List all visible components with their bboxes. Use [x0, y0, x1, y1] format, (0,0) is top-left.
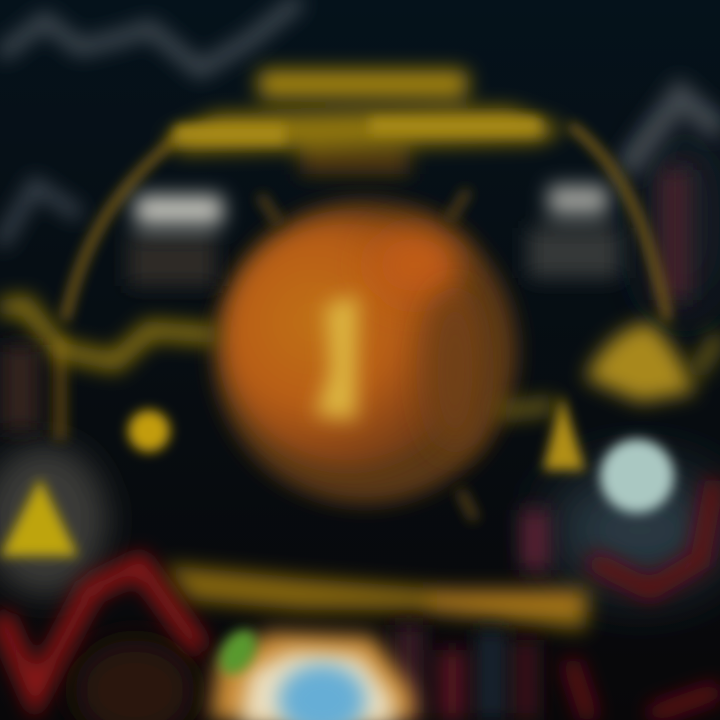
banner highlights: top gold band — [175, 118, 540, 143]
coin: central orange sphere — [213, 200, 517, 504]
coin: bright symbol — [315, 295, 358, 420]
coin: dark right side — [427, 290, 483, 450]
chart: lower left red line — [0, 565, 200, 695]
icon: warning triangle — [0, 478, 78, 556]
icon: grey box right — [528, 185, 620, 278]
icon: left dark brown block — [0, 345, 40, 430]
chart: lower centre red and blue bars — [395, 625, 537, 720]
icon: green patch — [212, 623, 264, 681]
chart line: left gold zigzag — [0, 305, 215, 362]
icon: gold dot — [128, 410, 170, 452]
chart line: middle left grey — [0, 185, 80, 245]
icon: pale blue circle — [600, 439, 674, 513]
banner: bottom gold text strip — [165, 565, 590, 630]
panel: grey halo behind warning triangle — [0, 445, 107, 595]
arc: gold outline around coin — [60, 125, 668, 440]
icon: bottom glowing blue panel — [210, 632, 416, 720]
shape: dark brown mound — [75, 640, 195, 720]
icon: gold drop — [543, 395, 585, 470]
chart line: right gold — [500, 335, 720, 412]
banner: top gold heading — [165, 70, 565, 174]
icon: grey box left — [128, 195, 223, 286]
chart line: upper right dark red and grey — [625, 95, 720, 300]
chart line: top left grey — [0, 0, 300, 70]
icon: gold cloud right — [585, 322, 695, 402]
coin: highlight upper right — [370, 227, 460, 303]
chart: lower right red line — [535, 480, 720, 720]
background glow: slate patches — [550, 120, 720, 590]
coin: gold ticks around rim — [260, 190, 475, 520]
